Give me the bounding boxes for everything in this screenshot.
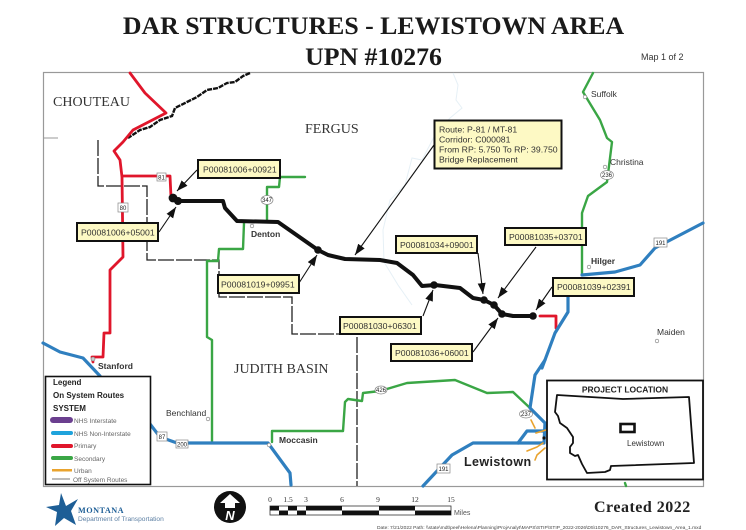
legend: Off System Routes xyxy=(73,477,128,484)
callout: P00081006+00921: P00081006+00921 xyxy=(203,164,277,174)
scale bar: 6 xyxy=(340,495,344,504)
town labels: Christina xyxy=(610,157,644,167)
callout: P00081035+03701 xyxy=(505,228,586,245)
town labels: Moccasin xyxy=(279,435,318,445)
callout: P00081019+09951 xyxy=(218,275,299,293)
route shields: 426 xyxy=(376,388,387,394)
callout: P00081034+09001: P00081034+09001 xyxy=(400,240,474,250)
scale bar: 1.5 xyxy=(283,495,293,504)
county labels: JUDITH BASIN xyxy=(234,362,328,377)
scale bar: 3 xyxy=(304,495,308,504)
icon: blue star xyxy=(46,493,78,526)
route shields: 81 xyxy=(158,176,165,182)
county boundary wiggly line xyxy=(128,73,250,138)
scale bar: 15 xyxy=(447,495,455,504)
callout: route information: Corridor: C000081 xyxy=(439,134,511,144)
callout: P00081039+02391 xyxy=(553,278,634,296)
town labels: Denton xyxy=(251,229,280,239)
scale bar: Miles xyxy=(454,510,471,517)
callout: P00081006+05001 xyxy=(77,223,158,241)
route shields: 191 xyxy=(655,241,666,247)
title xyxy=(123,11,624,71)
callout: P00081030+06301: P00081030+06301 xyxy=(343,321,417,331)
map frame xyxy=(44,72,704,486)
route shields: 87 xyxy=(159,435,166,441)
scale bar: 0 xyxy=(268,495,272,504)
town labels: Lewistown xyxy=(464,455,532,469)
callout: route information: Route: P-81 / MT-81 xyxy=(439,124,517,134)
callout: route information xyxy=(434,120,562,168)
title: DAR STRUCTURES - LEWISTOWN AREA xyxy=(123,11,624,40)
callout: P00081035+03701: P00081035+03701 xyxy=(509,232,583,242)
callout: P00081019+09951: P00081019+09951 xyxy=(221,280,295,290)
town labels: Maiden xyxy=(657,327,685,337)
created year: Created 2022 xyxy=(594,499,691,516)
NHS non-interstate routes (blue) xyxy=(43,223,703,486)
town labels: Stanford xyxy=(98,361,133,371)
legend: Urban xyxy=(74,468,92,475)
scale bar xyxy=(268,495,471,517)
logo: Montana Department of Transportation xyxy=(46,493,164,526)
title: UPN #10276 xyxy=(305,42,442,71)
project location inset: Lewistown xyxy=(627,439,664,448)
logo: Montana Department of Transportation: MONTANA xyxy=(78,506,124,515)
legend: SYSTEM xyxy=(53,404,86,413)
town labels: Suffolk xyxy=(591,89,618,99)
icon: north arrow: N xyxy=(225,508,235,523)
callout: P00081006+00921 xyxy=(198,160,280,178)
icon: north arrow xyxy=(214,491,246,523)
route shields: 347 xyxy=(262,198,273,204)
county labels: FERGUS xyxy=(305,122,359,137)
icon: Montana outline xyxy=(555,395,694,473)
legend: On System Routes xyxy=(53,391,125,400)
legend: NHS Interstate xyxy=(74,418,117,425)
callout: P00081006+05001: P00081006+05001 xyxy=(81,228,155,238)
callout: P00081034+09001 xyxy=(396,236,477,253)
secondary routes (green) xyxy=(207,73,626,486)
county labels xyxy=(53,95,359,377)
map sheet number: Map 1 of 2 xyxy=(641,52,684,62)
project route xyxy=(169,194,537,320)
legend: Legend xyxy=(53,378,82,387)
logo: Montana Department of Transportation: Department of Transportation xyxy=(78,516,164,523)
callout: P00081036+06001: P00081036+06001 xyxy=(395,348,469,358)
off-system routes xyxy=(43,138,357,486)
route shields: 237 xyxy=(521,412,532,418)
callout: P00081030+06301 xyxy=(340,317,421,334)
callout: P00081039+02391: P00081039+02391 xyxy=(557,282,631,292)
urban routes (orange) xyxy=(527,420,546,460)
callout: P00081036+06001 xyxy=(391,344,472,361)
county labels: CHOUTEAU xyxy=(53,95,130,110)
route shields xyxy=(118,170,667,473)
callout: route information: Bridge Replacement xyxy=(439,154,518,164)
scale bar: 12 xyxy=(411,495,419,504)
town labels xyxy=(91,89,685,469)
legend: Primary xyxy=(74,443,97,450)
primary routes (red) xyxy=(92,73,556,362)
legend xyxy=(46,376,150,484)
scale bar: 9 xyxy=(376,495,380,504)
river xyxy=(383,73,462,305)
project location inset xyxy=(547,380,703,480)
town labels: Hilger xyxy=(591,256,616,266)
route shields: 191 xyxy=(438,467,449,473)
town labels: Benchland xyxy=(166,408,206,418)
callout arrows xyxy=(159,145,552,352)
legend: Secondary xyxy=(74,456,106,463)
callout: route information: From RP: 5.750 To RP: 39.750 xyxy=(439,144,558,154)
route shields: 236 xyxy=(602,173,613,179)
route shields: 200 xyxy=(177,442,188,448)
route shields: 80 xyxy=(120,206,127,212)
project location inset: PROJECT LOCATION xyxy=(582,384,668,394)
legend: NHS Non-Interstate xyxy=(74,431,131,438)
